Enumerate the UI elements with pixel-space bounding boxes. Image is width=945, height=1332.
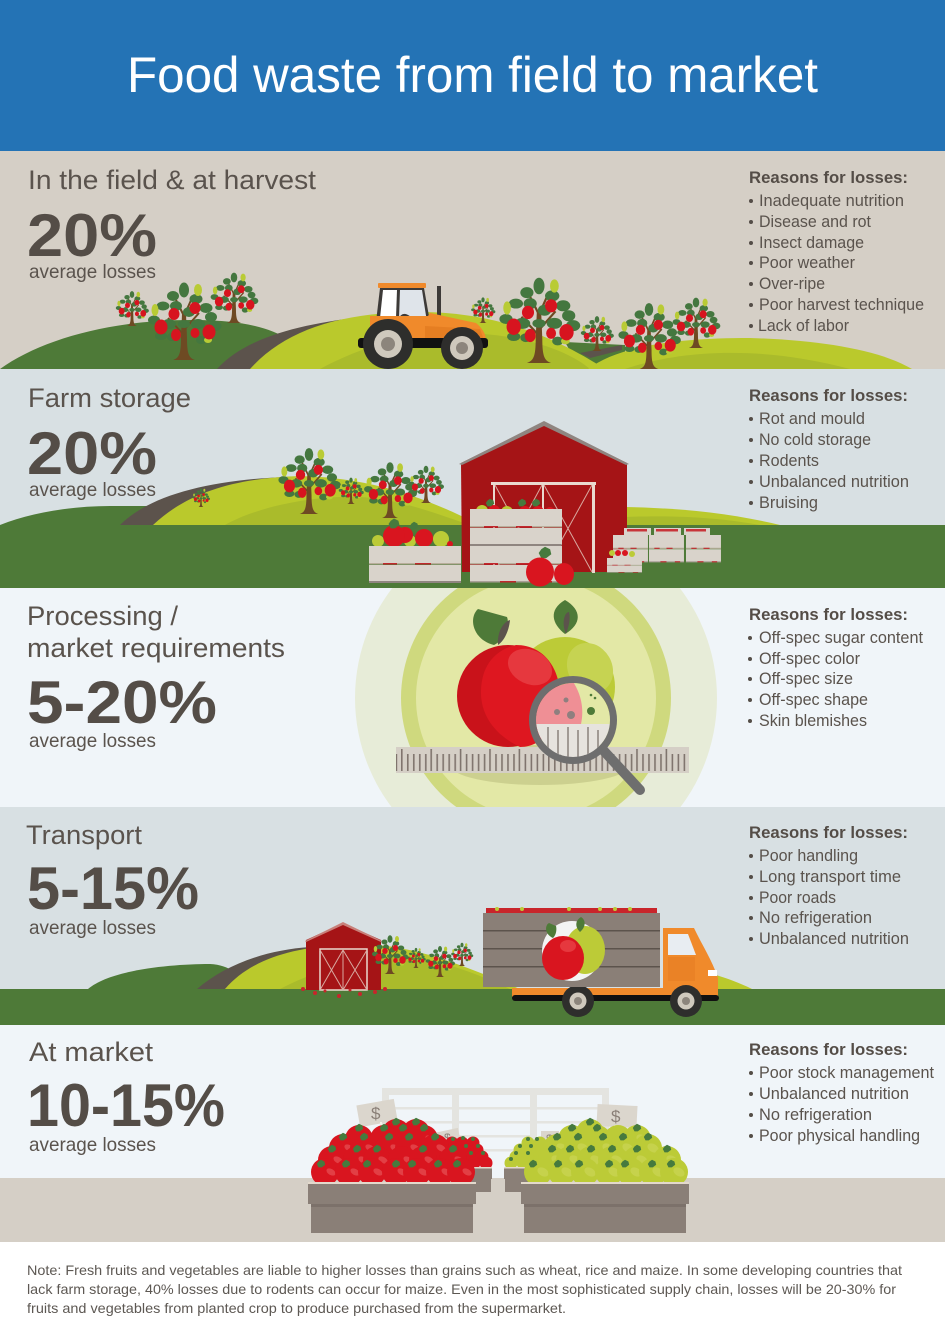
icon: red barn [459,421,629,573]
illustration: hills and ground [0,944,945,1025]
icon: apple trees [116,273,720,369]
heading: farm storage: Farm storage [28,383,191,413]
heading: processing [27,601,285,663]
list: reasons for losses, field: Insect damage [759,234,864,252]
list: reasons for losses, transport: Unbalanced nutrition [759,930,909,948]
panel: in the field and at harvest [0,151,945,369]
list: reasons for losses, storage [749,386,909,512]
caption: average losses: average losses [29,730,156,752]
list: reasons for losses, market: Poor stock management [759,1064,934,1082]
icon: fallen apples [526,547,574,586]
list: reasons for losses, processing: Skin blemishes [759,712,867,730]
list: reasons for losses, field: Lack of labor [758,317,849,335]
list: reasons for losses, storage: Bruising [759,494,818,512]
list: reasons for losses, field: Disease and rot [759,213,871,231]
list: reasons for losses, field [749,168,924,335]
list: reasons for losses, transport: Poor handling [759,847,858,865]
list: reasons for losses, storage: Rot and mould [759,410,865,428]
caption: average losses: average losses [29,1134,156,1156]
icon: stacked crates of apples [369,499,562,583]
list: reasons for losses, storage: No cold storage [759,431,871,449]
list: reasons for losses, transport [749,823,909,948]
heading: transport: Transport [26,820,142,850]
panel: processing and market requirements [0,588,945,807]
icon: green apple crate [521,1182,689,1233]
footnote: lack farm storage, 40% losses due to rodents can occur for maize. Even in the most sophisticated supply chain, losses will be 20-30% for [27,1281,896,1297]
list: reasons for losses, processing: Off-spec color [759,650,860,668]
icon: price tag, green apples [596,1104,638,1147]
icon: red apple crate [308,1182,476,1233]
icon: price tag, red apples: $ [371,1104,381,1123]
icon: pile of red apples [311,1118,475,1186]
heading: processing: Processing / [27,601,178,631]
list: reasons for losses, storage: Reasons for losses: [749,386,908,405]
title: Food waste from field to market [127,47,818,103]
icon: small crates [607,528,721,573]
list: reasons for losses, field: Poor harvest technique [759,296,924,314]
icon: delivery truck [483,907,719,1017]
icon: back crate with green apples [504,1131,559,1192]
icon: apples [457,600,622,747]
list: reasons for losses, market: Poor physical handling [759,1127,920,1145]
icon: magnifying glass [530,680,640,790]
icon: pile of green apples [524,1118,688,1186]
list: reasons for losses, field: Poor weather [759,254,855,272]
stat: 20%: 20% [27,420,157,487]
icon: market window [382,1088,609,1178]
list: reasons for losses, processing: Off-spec size [759,670,853,688]
list: reasons for losses, processing: Reasons for losses: [749,605,908,624]
panel: transport [0,807,945,1025]
illustration: hills with road [0,312,912,369]
list: reasons for losses, transport: No refrigeration [759,909,872,927]
list: reasons for losses, field: Inadequate nutrition [759,192,904,210]
stat: 10-15%: 10-15% [27,1072,225,1139]
list: reasons for losses, transport: Poor roads [759,889,836,907]
caption: average losses: average losses [29,917,156,939]
stat: 5-15%: 5-15% [27,855,199,922]
list: reasons for losses, market [749,1040,934,1145]
list: reasons for losses, processing: Off-spec sugar content [759,629,923,647]
icon: apples badge on truck [542,917,605,981]
heading: at market: At market [29,1037,154,1067]
icon: back crate with red apples [436,1128,492,1192]
icon: apple trees [192,448,444,518]
list: reasons for losses, market: No refrigeration [759,1106,872,1124]
list: reasons for losses, field: Over-ripe [759,275,825,293]
list: reasons for losses, storage: Unbalanced nutrition [759,473,909,491]
caption: average losses: average losses [29,479,156,501]
panel: farm storage [0,369,945,588]
icon: red barn [301,922,387,998]
panel: at market [0,1025,945,1242]
icon: tractor [358,283,488,369]
footnote: Note: Fresh fruits and vegetables are liable to higher losses than grains such as wheat, rice and maize. In some developing countries that [27,1262,902,1278]
list: reasons for losses, field: Reasons for losses: [749,168,908,187]
heading: processing: market requirements [27,633,285,663]
stat: 5-20%: 5-20% [27,669,217,736]
icon: measuring ruler [396,747,689,773]
list: reasons for losses, storage: Rodents [759,452,819,470]
list: reasons for losses, transport: Reasons for losses: [749,823,908,842]
stat: 20%: 20% [27,202,157,269]
icon: price tag, green apples: $ [611,1107,621,1126]
caption: average losses: average losses [29,261,156,283]
footnote [0,1242,945,1332]
list: reasons for losses, market: Unbalanced nutrition [759,1085,909,1103]
header banner [0,0,945,151]
heading: in the field: In the field & at harvest [28,165,317,195]
footnote: fruits and vegetables from planted crop to produce purchased from the supermarket. [27,1300,566,1316]
list: reasons for losses, processing: Off-spec shape [759,691,868,709]
illustration: hills and ground [0,476,945,588]
icon: apple trees [372,935,473,977]
list: reasons for losses, market: Reasons for losses: [749,1040,908,1059]
icon: concentric circles [355,588,717,807]
list: reasons for losses, processing [748,605,923,730]
icon: price tag, red apples [356,1099,398,1146]
icon: back crate with red apples: $ [444,1131,451,1145]
icon: back crate with green apples: $ [546,1132,553,1146]
list: reasons for losses, transport: Long transport time [759,868,901,886]
